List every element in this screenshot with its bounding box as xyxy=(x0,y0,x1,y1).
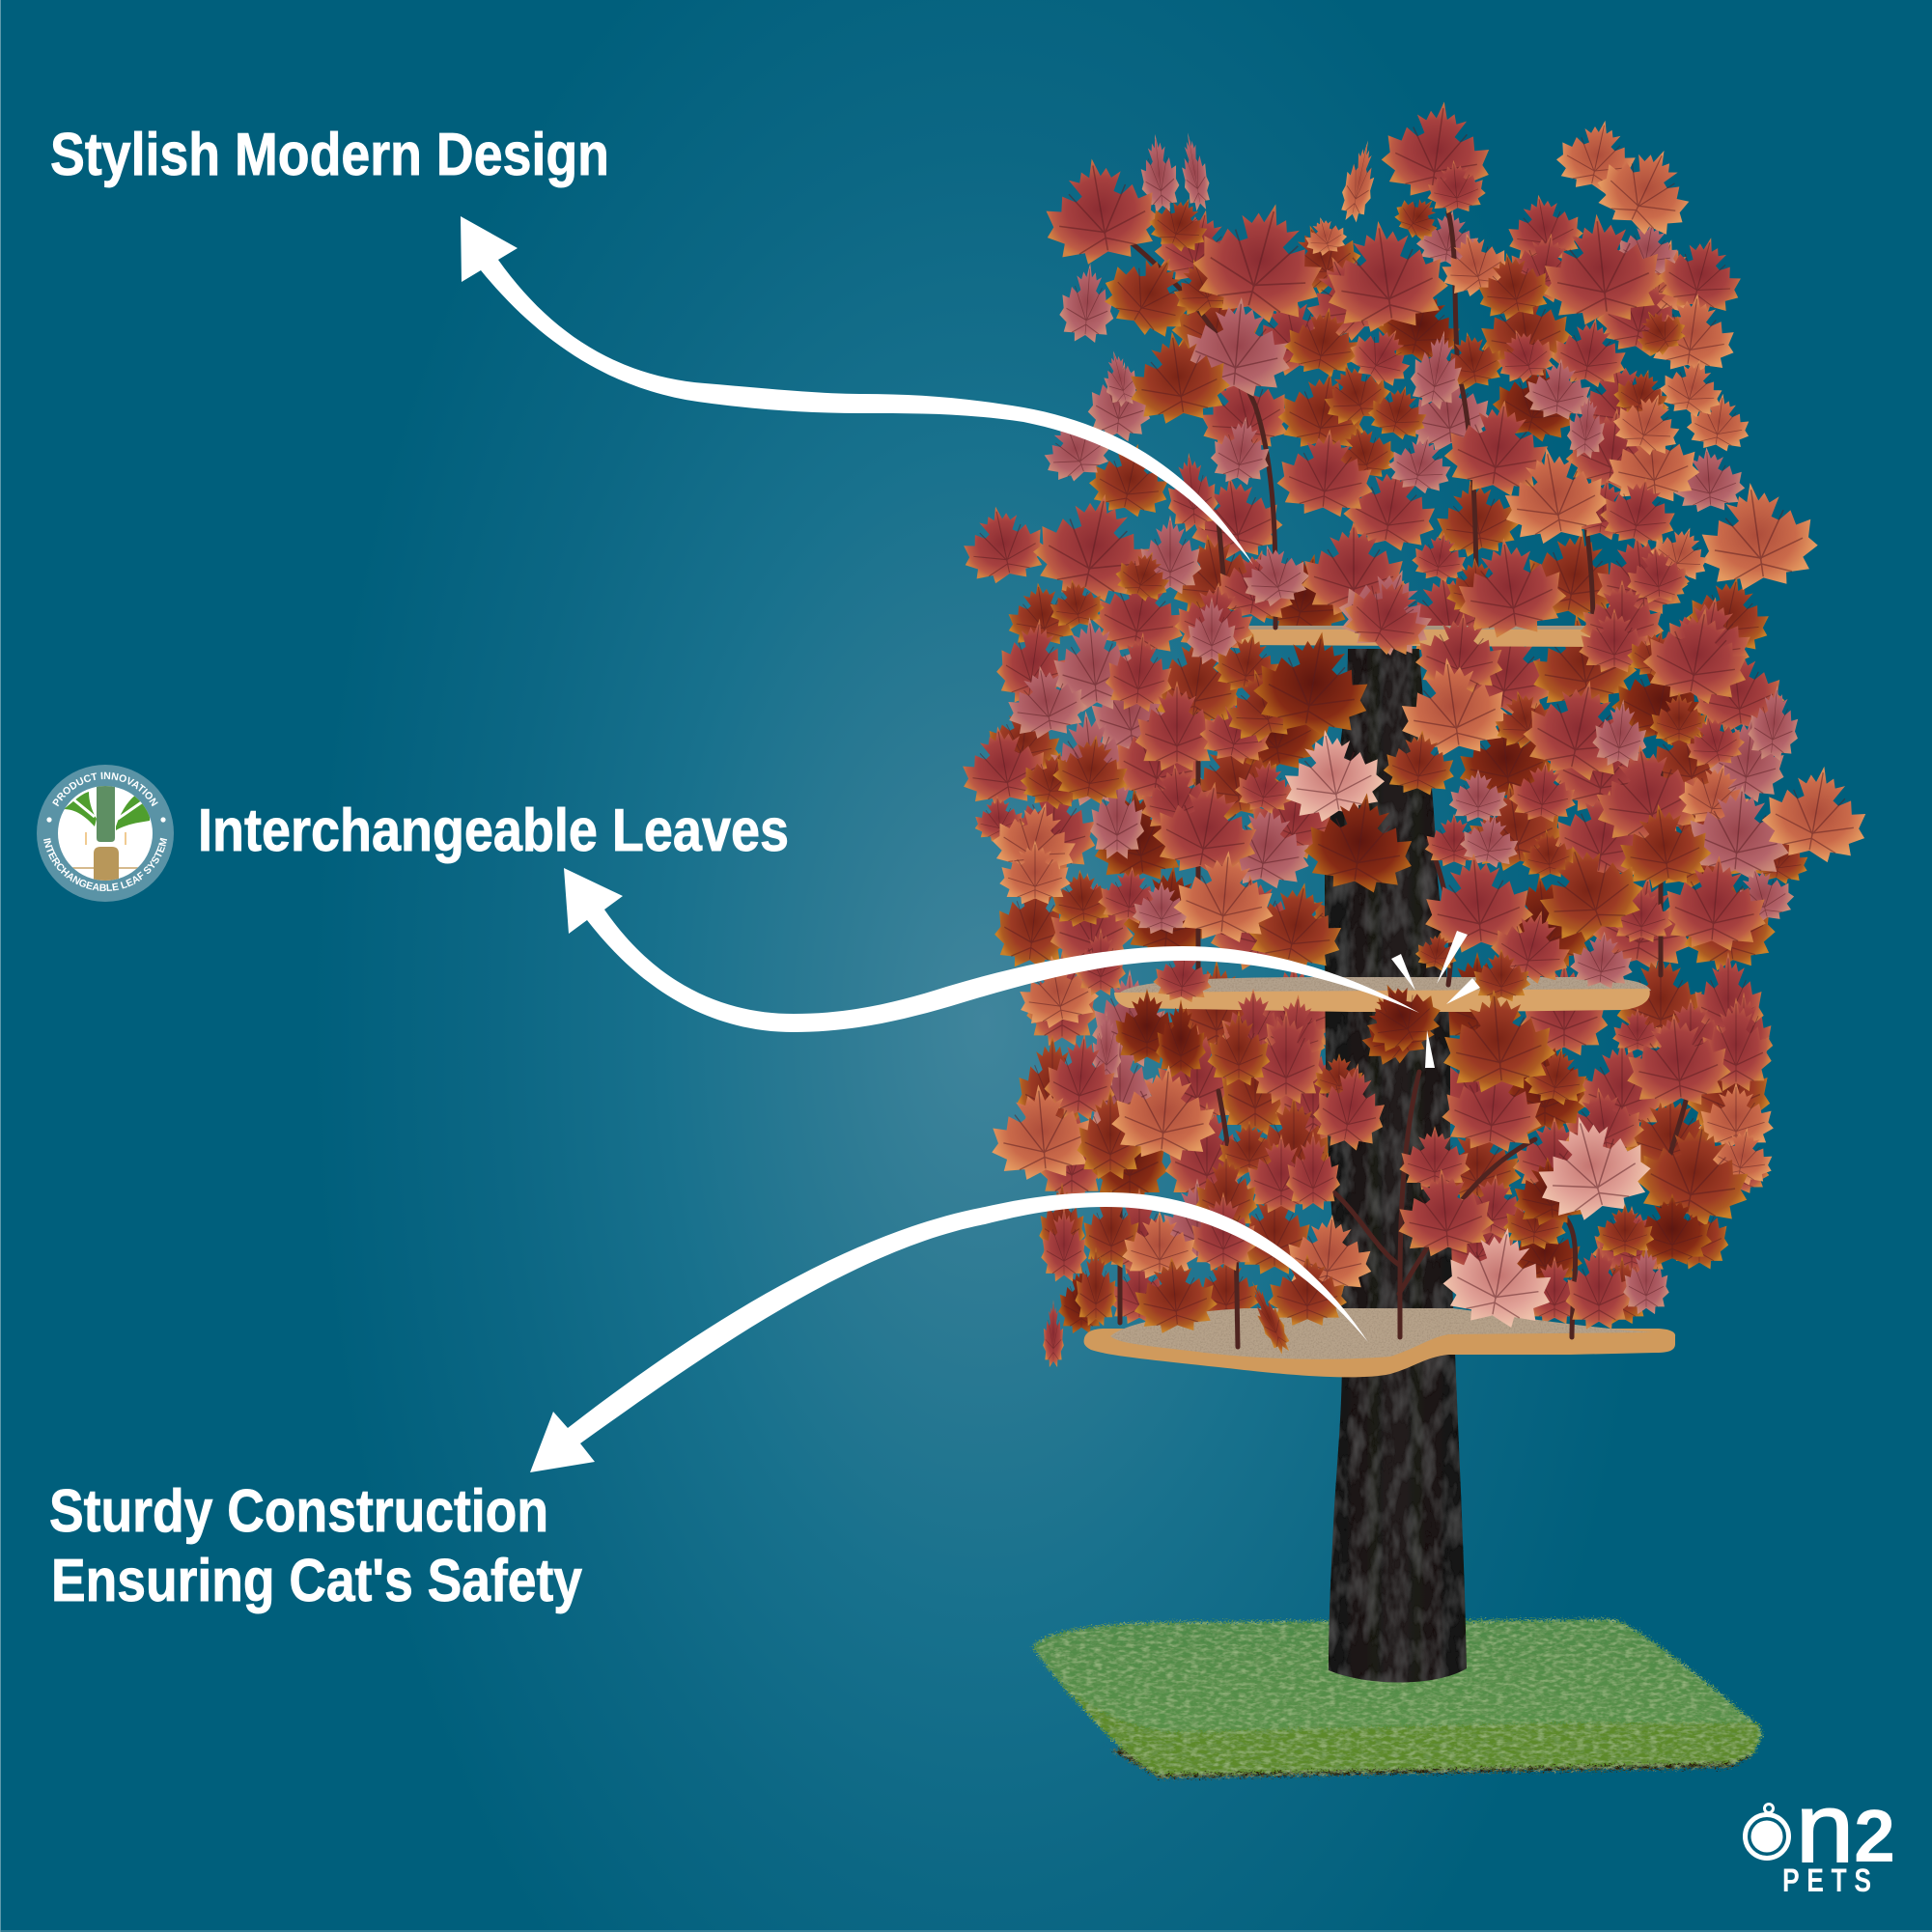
arrow: interchangeable leaves xyxy=(564,868,1419,1032)
logo: on2 pets: n xyxy=(1796,1775,1854,1883)
arrow: sturdy construction xyxy=(530,1192,1368,1472)
arrow: stylish modern design xyxy=(461,216,1253,565)
tree trunk xyxy=(1325,649,1467,1683)
badge: interchangeable leaf system: PRODUCT INNOVATION xyxy=(52,772,158,807)
top shelf xyxy=(1237,626,1594,647)
foliage: background layer xyxy=(983,188,1810,1333)
middle shelf xyxy=(1114,977,1651,1012)
branches xyxy=(1120,212,1691,1347)
logo: on2 pets: 2 xyxy=(1854,1795,1895,1878)
foliage: lower part of upper canopy xyxy=(955,482,1759,683)
logo: on2 pets xyxy=(1746,1775,1895,1899)
foreground leaf at middle shelf xyxy=(1353,968,1449,1062)
foliage: lower canopy xyxy=(986,979,1778,1367)
heading: sturdy construction: Sturdy Construction xyxy=(49,1478,548,1545)
foreground leaf at top shelf xyxy=(1334,563,1442,666)
badge: interchangeable leaf system: INTERCHANGEABLE LEAF SYSTEM xyxy=(43,838,168,891)
foliage: middle canopy xyxy=(954,597,1876,1032)
bottom shelf xyxy=(1084,1308,1675,1377)
logo: on2 pets: PETS xyxy=(1782,1862,1871,1899)
heading: ensuring cat's safety: Ensuring Cat's Safety xyxy=(51,1548,582,1614)
heading: interchangeable leaves: Interchangeable Leaves xyxy=(198,798,789,864)
foliage: upper canopy xyxy=(1034,95,1823,595)
highlight ticks around leaf xyxy=(1391,931,1480,1068)
badge: interchangeable leaf system xyxy=(37,765,174,902)
grass base xyxy=(1032,1619,1761,1778)
heading: stylish modern design: Stylish Modern Design xyxy=(50,122,609,188)
